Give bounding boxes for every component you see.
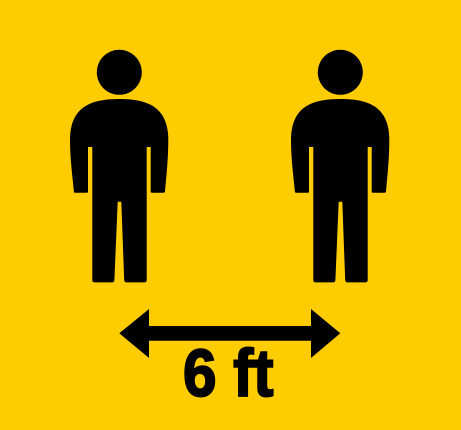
distance label: 6 ft xyxy=(183,335,273,411)
icon: left person xyxy=(70,50,168,282)
arrow: double-headed distance arrow xyxy=(119,309,340,358)
icon: right person xyxy=(291,50,389,282)
